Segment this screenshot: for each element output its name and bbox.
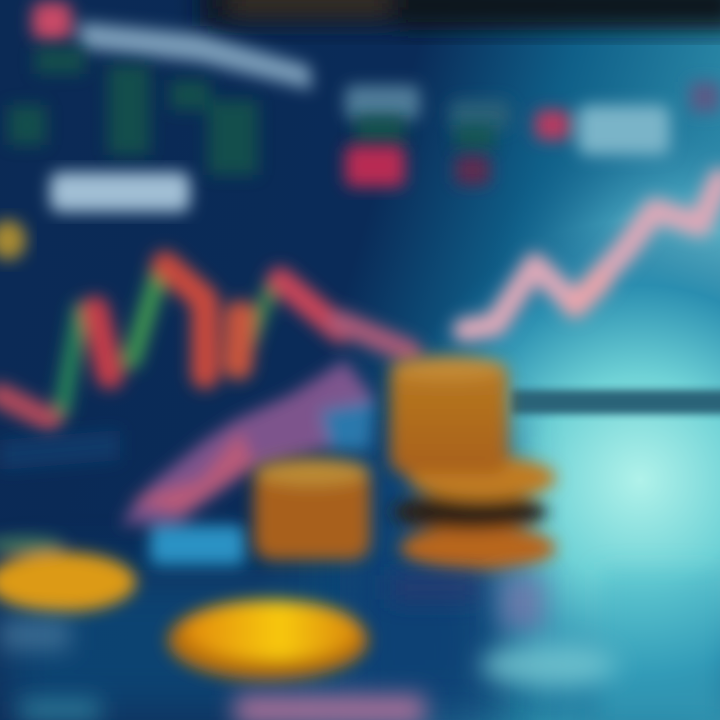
upper ticker: red markers and pale labels: [32, 2, 720, 155]
dark top band: [200, 0, 720, 30]
horizontal dark band: [510, 390, 720, 414]
lower reflections: [0, 570, 720, 720]
mid candlestick line chart: [0, 265, 410, 420]
coin: front: [168, 600, 368, 680]
red candle cluster: [345, 145, 490, 187]
coin: left: [0, 537, 136, 612]
upper green candlesticks: [8, 48, 495, 175]
yellow side marker: [0, 220, 26, 260]
coin stack: centre: [254, 458, 370, 560]
pale label block: [50, 172, 190, 212]
coin stack: right tower: [390, 356, 556, 570]
lower pink and purple area chart: [0, 360, 375, 565]
rising pink trend line: [465, 180, 720, 330]
